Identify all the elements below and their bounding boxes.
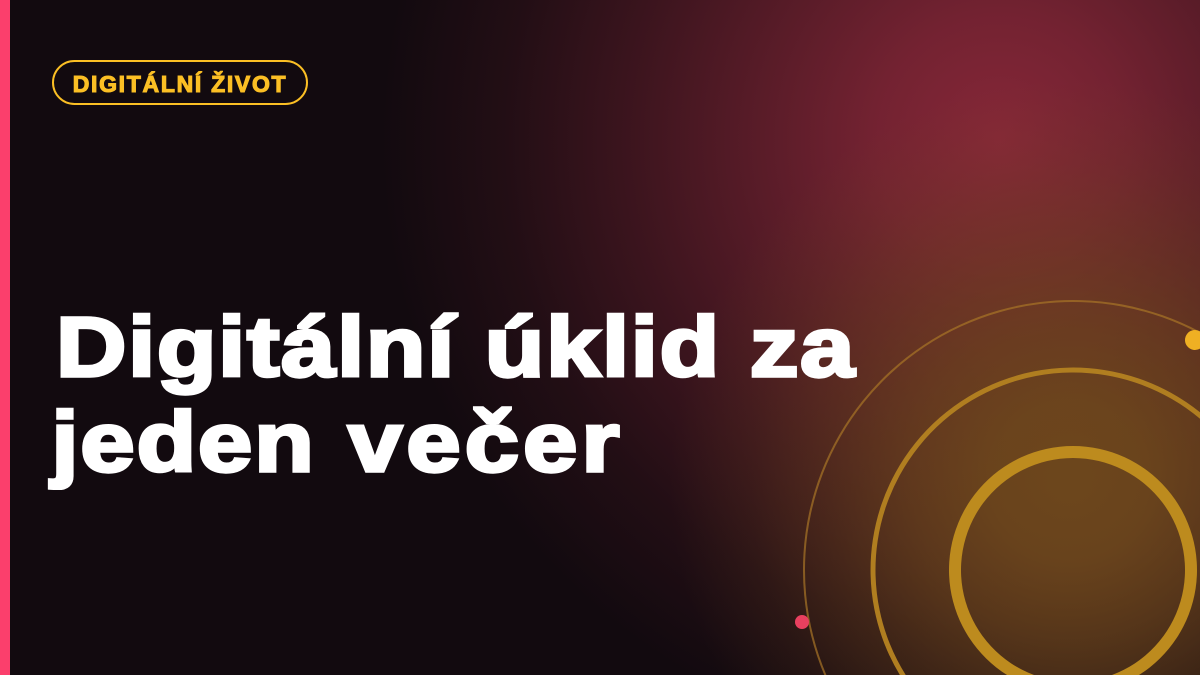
accent bar [0,0,10,675]
title: jeden večer [51,395,624,489]
title: Digitální úklid za [56,300,856,394]
ring: outer [803,300,1200,675]
category tag: DIGITÁLNÍ ŽIVOT [73,71,287,97]
category tag [52,60,308,105]
dot: pink [795,615,809,629]
ring: inner [949,446,1197,675]
title [48,300,857,490]
ring: middle [871,368,1200,675]
dot: amber [1185,330,1200,350]
